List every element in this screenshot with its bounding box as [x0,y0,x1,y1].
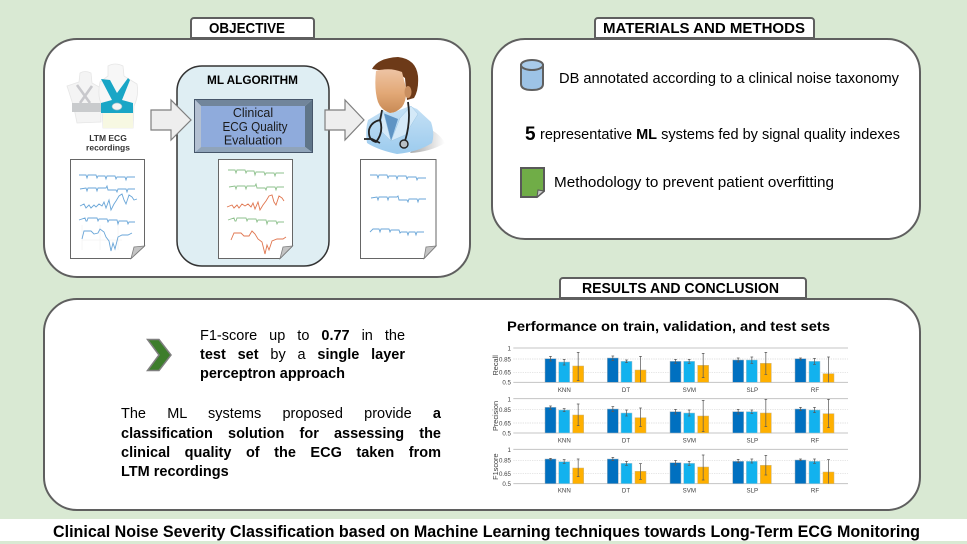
chart: recall: RF [811,387,819,394]
text: LTM ECG recordings [86,133,130,152]
chart: F1 score: RF [811,488,819,495]
panel: objective [43,38,471,278]
text: representative ML systems: representative ML systems fed by signal quality indexes [540,127,900,143]
chart: precision: SLP [747,437,758,444]
chart: F1 score [491,447,848,495]
chart: precision: 1 [508,396,512,403]
chart: F1 score: 0.85 [499,458,512,465]
arrow: recordings to algorithm [151,100,191,140]
chart: recall: KNN [558,387,571,394]
chart: F1 score: 1 [508,447,512,454]
chart: precision: 0.65 [499,420,512,427]
icon: document with noisy ECG recordings [70,160,144,258]
box: clinical ECG quality evaluation: Clinical [233,106,273,120]
text: LTM ECG recordings: recordings [86,142,130,152]
chart: recall: 0.5 [502,380,512,387]
chart: recall: 1 [508,346,512,353]
chart: F1 score: DT [622,488,630,495]
chart: recall: SLP [747,387,758,394]
text: number five: 5 [525,124,536,145]
text block: F1-score result: perceptron approach [200,366,345,382]
chart: recall: SVM [683,387,696,394]
chart: precision: KNN [558,437,571,444]
chart: F1 score: 0.5 [502,481,512,488]
box: clinical ECG quality evaluation [194,99,313,153]
chart: F1 score: F1score [491,453,500,480]
text block: conclusion: clinical quality of the ECG taken from [121,445,441,461]
text block: F1-score result: test set by a single layer [200,347,405,363]
chart: precision: Precision [491,401,500,431]
box: clinical ECG quality evaluation: Evaluation [224,134,282,148]
tab: objective [190,17,315,40]
tab: results and conclusion [559,277,807,300]
chart: F1 score: SVM [683,488,696,495]
chart: precision: 0.5 [502,430,512,437]
chart: F1 score: SLP [747,488,758,495]
chart: precision: DT [622,437,630,444]
text block: conclusion: The ML systems proposed provide a [121,406,441,422]
icon: database cylinder [521,60,543,90]
chart: precision: RF [811,437,819,444]
heading: materials and methods: MATERIALS AND METHODS [603,20,805,37]
chart: precision: SVM [683,437,696,444]
panel: results and conclusion [43,298,921,511]
text: methodology: Methodology to prevent patient overfitting [554,175,834,191]
icon: doctor with stethoscope [364,57,445,154]
icon: green note [521,168,544,197]
box: clinical ECG quality evaluation: ECG Quality [222,120,288,134]
chart: F1 score: KNN [558,488,571,495]
panel: materials and methods [491,38,921,240]
arrow: algorithm to clinician [325,100,364,140]
heading: objective: OBJECTIVE [209,20,285,37]
chart: recall: Recall [491,355,500,376]
chart: recall: DT [622,387,630,394]
chart: precision [491,396,848,444]
text block: F1-score result [200,328,405,382]
tab: materials and methods [594,17,815,40]
icon: ECG vests on torsos [67,64,138,128]
chart: recall [491,346,848,394]
chart: F1 score: 0.65 [499,471,512,478]
chart: performance bars [491,346,848,495]
chart title: Performance on train, validation, and test sets [507,319,830,334]
heading: results and conclusion: RESULTS AND CONCLUSION [582,280,779,297]
text: LTM ECG recordings: LTM ECG [89,133,127,143]
text: database annotated: DB annotated according to a clinical noise taxonomy [559,71,900,87]
icon: document with classified ECG recordings [218,160,292,258]
icon: green chevron [148,340,171,370]
chart: recall: 0.65 [499,370,512,377]
icon: document with clean ECG recordings [360,160,436,258]
panel: ML algorithm [177,66,329,266]
heading: ML algorithm: ML ALGORITHM [207,73,298,87]
text block: F1-score result: F1-score up to 0.77 in the [200,328,405,344]
text block: conclusion: LTM recordings [121,464,229,480]
background strip: footer [0,519,967,541]
text block: conclusion: classification solution for assessing the [121,426,441,442]
footer title: Clinical Noise Severity Classification based on Machine Learning techniques towards Long-Term ECG Monitoring [53,523,920,541]
chart: recall: 0.85 [499,356,512,363]
text block: conclusion [121,406,442,480]
chart: precision: 0.85 [499,407,512,414]
